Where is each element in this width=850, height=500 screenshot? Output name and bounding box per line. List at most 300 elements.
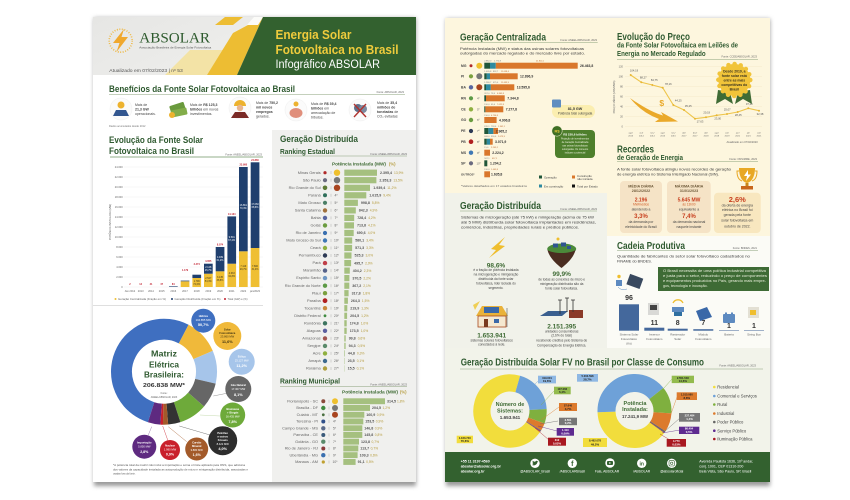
callout: investments: R$ 220,6 bilhões — [563, 133, 587, 137]
stat: 1.653.941: 1.653.941 — [477, 332, 507, 339]
municipal ranking table: 8º — [333, 447, 337, 451]
state ranking table: 690,6 4,0% — [357, 231, 375, 235]
legend: consumption classes: Poder Público — [717, 420, 744, 425]
bar chart: solar capacity: 4.939 — [217, 256, 224, 259]
bubble: solar: 23.860 MW — [220, 334, 235, 338]
benefit: CO2 — [349, 99, 398, 121]
heading: evolution — [109, 135, 263, 157]
panel: price evolution — [611, 31, 764, 144]
stat: 98,6% — [473, 263, 519, 290]
social: youtube — [595, 458, 620, 473]
contact: absolar.org.br — [461, 470, 485, 474]
bubble: coal: Carvão — [192, 440, 202, 444]
line chart: auction price: 40 — [620, 104, 624, 108]
state ranking table: 404,2 2,3% — [353, 269, 371, 273]
stacked bar chart by state: 11.058,4 — [501, 71, 510, 73]
stat: 98,6%: fotovoltaica, líder isolada do — [476, 281, 516, 285]
stat: 1.653.941 — [471, 332, 513, 346]
social: linkedin: /ABSOLAR — [633, 469, 651, 473]
legend: consumption classes — [713, 385, 757, 442]
record: maximum daily: MÁXIMA DIÁRIA — [675, 184, 704, 189]
bubble: nuclear: 0,9% — [166, 452, 175, 456]
bubble: solar — [213, 322, 241, 350]
bar chart: solar capacity: 24.860 — [251, 159, 259, 162]
chart legend — [539, 174, 598, 188]
benefit: capacity: Mais de — [135, 103, 147, 107]
stat: 98,6%: 98,6% — [487, 263, 505, 270]
icon: floating island — [547, 238, 576, 268]
bubble: biomass: 7,8% — [228, 420, 238, 424]
record: maximum daily: naquele instante — [677, 225, 702, 229]
tags: installed capacity: 86.404 — [685, 427, 694, 431]
stacked bar chart by state: 7.344,8 — [507, 97, 519, 101]
tags: number of systems: 1.413 — [562, 428, 569, 432]
stat: 2.151.395: (2,6% do total) — [551, 333, 572, 337]
badge: most competitive: entre as mais — [723, 78, 745, 82]
stacked bar chart by state: 4.756,8 — [491, 115, 499, 117]
chart legend: Geração Centralizada (Fração em %) — [118, 297, 166, 301]
line chart: auction price: ago/ — [629, 132, 633, 134]
bar chart: manufacturers: Módulo — [698, 333, 709, 337]
line chart: auction price: 23,00 — [714, 116, 722, 120]
stacked bar chart by state: 397,0 — [484, 93, 490, 95]
benefit: taxes: arrecadação de — [311, 111, 335, 115]
bar chart: manufacturers: 96 — [625, 295, 633, 302]
state ranking table: Acre — [313, 350, 321, 356]
stacked bar chart by state: 617,1 — [492, 158, 498, 160]
state ranking table: 1.615,9 9,4% — [369, 194, 391, 198]
record: average daily: 3,3% — [634, 214, 648, 220]
stacked bar chart by state: CE — [461, 108, 466, 112]
line chart: auction price: 32,38 — [757, 112, 764, 116]
bubble: oil: Fósseis — [218, 438, 228, 442]
icon: string box — [748, 307, 759, 318]
stat: 2.151.395: Compensação de Energia Elétrica. — [537, 344, 586, 348]
arrow: falling price — [630, 98, 678, 122]
donut chart: installed capacity — [577, 374, 700, 447]
heading: price evolution: Fonte: CCEE/ABSOLAR, 2023 — [722, 54, 758, 58]
tags: number of systems: 319.601 — [542, 376, 552, 380]
legend: consumption classes: Residencial — [717, 385, 739, 390]
state ranking table: Rio Grande do Sul — [289, 185, 321, 190]
state ranking table: 8º — [334, 224, 338, 228]
heading: price evolution — [617, 31, 758, 59]
line chart: auction price: 84,75 — [651, 78, 658, 82]
line chart: auction price: nov/ — [671, 132, 676, 134]
municipal ranking table: Potência Instalada (MW) — [342, 390, 399, 394]
stat: 2.151.395: unidades consumidoras — [545, 329, 579, 333]
municipal ranking table: 113,7 0,7% — [360, 447, 378, 451]
logo wordmark: ABSOLAR — [139, 31, 210, 47]
donut chart: number of systems: Número de — [496, 402, 524, 408]
state ranking table: 99,8 0,6% — [349, 337, 365, 341]
stacked bar chart by state: 1.204,2 — [490, 162, 501, 166]
tags: installed capacity: 4.770 — [673, 439, 680, 443]
callout: total granted power: 81,5 GW — [568, 107, 583, 111]
tags: installed capacity: 2.551.548 — [677, 376, 689, 380]
line chart: auction price: out/ — [639, 131, 644, 134]
social: twitter: @ABSOLAR_Brasil — [520, 469, 550, 473]
icon: trophy — [737, 168, 757, 190]
state ranking table: Mato Grosso do Sul — [286, 238, 321, 243]
stacked bar chart by state: 190,0 — [484, 104, 490, 106]
line chart: auction price: 78,16 — [665, 82, 672, 86]
benefit: taxes: Mais de — [311, 102, 324, 106]
bar chart: solar capacity: 23.980 — [239, 164, 248, 166]
bar chart: solar capacity: 2015 — [159, 289, 165, 293]
state ranking table: 14º — [334, 269, 340, 273]
line chart: auction price: 100 — [619, 74, 624, 78]
municipal ranking table: Uberlândia - MG — [289, 452, 318, 457]
benefit: taxes: bilhões — [311, 106, 323, 110]
line chart: auction price: 20,19 — [703, 110, 711, 114]
state ranking table: 21º — [334, 321, 340, 325]
tags: number of systems: 107.066 — [557, 387, 568, 391]
state ranking table: São Paulo — [303, 177, 321, 182]
stat: 99,9% — [538, 271, 585, 290]
benefit: taxes: R$ 39,4 — [324, 102, 337, 106]
tags: number of systems: 19,6% — [543, 379, 552, 383]
social: instagram: @absolaroficial — [660, 469, 684, 473]
panel: generation records — [617, 143, 761, 233]
stacked bar chart by state: 2.209,2 — [491, 147, 499, 149]
heading: records — [617, 143, 758, 162]
bar chart: solar capacity: 32,8% — [228, 275, 236, 278]
state ranking table: 27º — [334, 367, 340, 371]
benefit: taxes: tributos. — [311, 116, 323, 120]
bubble: solar: 11,6% — [222, 340, 233, 344]
record: monthly supply: 2,6% — [729, 195, 746, 204]
municipal ranking table: (%) — [400, 390, 407, 394]
benefit: investments: investimentos. — [190, 112, 212, 116]
stacked bar chart by state: 78,0 — [491, 93, 496, 95]
address: conj. 1001, CEP 01310-200 — [699, 464, 743, 468]
state ranking table: Rio de Janeiro — [296, 230, 321, 235]
state ranking table: 998,8 5,8% — [361, 201, 379, 205]
bar chart: solar capacity: 2022 — [240, 289, 247, 293]
heading: distributed generation — [460, 201, 598, 212]
bar chart: solar capacity: 16.861 — [240, 204, 248, 207]
stat: 98,6%: segmento. — [489, 286, 504, 290]
stacked bar chart by state: 6º — [477, 118, 480, 122]
state ranking table: 525,3 3,0% — [354, 254, 373, 258]
title — [276, 28, 398, 71]
benefit: CO2: 35,4 — [390, 101, 397, 105]
stacked bar chart by state: 13.595,6 — [517, 86, 530, 90]
stacked bar chart by state: 7.022,8 — [497, 104, 505, 106]
line chart: auction price: PREÇO MÉDIO (US$/MWh) — [611, 81, 616, 113]
bar chart: solar capacity: 38,8% — [217, 279, 224, 282]
record: maximum daily: equivalente a — [679, 208, 699, 212]
benefit: jobs: 750,2 — [269, 101, 278, 105]
legend: consumption classes: Serviço Público — [717, 428, 747, 433]
state ranking table: 24º — [334, 344, 340, 348]
municipal ranking table: 7º — [333, 440, 337, 444]
line chart: auction price: 35,25 — [685, 104, 692, 108]
social: facebook — [560, 459, 585, 473]
bar chart: solar capacity: 7.800 — [252, 265, 259, 268]
heading: state ranking — [280, 149, 408, 156]
tags: number of systems — [457, 376, 577, 446]
state ranking table: Rondônia — [304, 320, 322, 325]
stat: 98,6%: é a fração de potência instalada — [473, 268, 519, 272]
stacked bar chart by state: BA — [461, 86, 466, 90]
bubble: coal: 1,6% — [193, 453, 202, 457]
bar chart: solar capacity: 2.474 — [194, 263, 200, 266]
intro text: até 5 MW) distribuída solar fotovoltaica implantados em residências, — [461, 220, 596, 224]
line chart: auction price: 17,63 — [697, 120, 704, 124]
municipal ranking table: 109,3 0,6% — [360, 453, 378, 457]
stacked bar chart by state: 5º — [477, 108, 480, 112]
update date: Atualizado em 07/02/2023 | nº 53 — [109, 68, 184, 73]
intro text: Sistemas de microgeração (até 75 kW) e minigeração (acima de 75 kW — [461, 215, 594, 219]
stacked bar chart by state: 1.005,8 — [484, 71, 492, 73]
social: twitter — [520, 459, 550, 473]
line chart: auction price: 0 — [622, 124, 624, 128]
bubble: oil: 4,0% — [218, 447, 228, 451]
bar chart: solar capacity: 31,4% — [252, 268, 259, 271]
heading: price evolution: Energia no Mercado Regulado — [617, 51, 706, 58]
bar chart: solar capacity: 70,3% — [240, 207, 248, 210]
benefit: investments: Mais de — [190, 103, 203, 107]
benefit: capacity: operacionais. — [135, 112, 156, 116]
intro text: FINAME do BNDES. — [617, 260, 652, 264]
badge: most competitive: competitivas do — [721, 83, 747, 87]
state ranking table: 44,8 0,3% — [348, 352, 364, 356]
state ranking table: 15,5 0,1% — [348, 367, 364, 371]
bubble: coal — [185, 438, 208, 460]
line chart: auction price: out/ — [725, 131, 729, 134]
record: average daily: 28/12/2022 — [632, 189, 650, 193]
bubble: gas: 8,1% — [234, 393, 243, 397]
donut centre text: Brasileira: — [144, 370, 184, 380]
line chart: auction price: 2017 — [693, 136, 698, 138]
tags: installed capacity: 8,8% — [684, 396, 691, 400]
footnote: usadas fora da fonte. — [113, 473, 136, 476]
callout: investments: Projeção de investimentos — [561, 138, 590, 140]
bar chart: manufacturers: (Kit) — [626, 341, 632, 345]
bar chart: manufacturers: 8 — [676, 320, 680, 327]
stacked bar chart by state: 65,0 — [491, 104, 496, 106]
benefit: jobs: mil novos — [256, 106, 272, 110]
bar chart: solar capacity: 18.000 — [115, 195, 123, 199]
bar chart: solar capacity: 24.000 — [115, 165, 123, 169]
chart legend: Em construção — [544, 184, 564, 188]
social: facebook: /ABSOLARBrasil — [560, 469, 585, 473]
state ranking table: 10º — [334, 239, 340, 243]
panel: supply chain — [616, 241, 769, 345]
bar chart: manufacturers: Sistema Solar — [620, 333, 638, 337]
tags: number of systems: 3,7% — [565, 407, 572, 411]
state ranking table: 1.939,4 11,2% — [373, 186, 396, 190]
state ranking table: Ceará — [310, 245, 322, 250]
line chart: auction price: 2021 — [757, 136, 762, 138]
panel: benefits row — [109, 97, 398, 128]
bar chart: solar capacity: 1.179 — [182, 269, 189, 272]
benefit: jobs: Mais de — [256, 101, 269, 105]
line chart: auction price: 120 — [619, 64, 624, 68]
municipal ranking table: 9º — [333, 453, 337, 457]
footnote: dos valores da capacidade instalada as autoprodução de micro e minigeração distribuída, associadas e — [113, 468, 249, 471]
contact: +55 11 3197-4560 — [461, 460, 490, 464]
stacked bar chart by state: 150,0 — [484, 115, 490, 117]
state ranking table: Alagoas — [307, 328, 321, 333]
tags: installed capacity: 1.515.060 — [681, 392, 693, 396]
bubble: wind: 11,2% — [236, 364, 248, 368]
icon: solar module — [696, 307, 712, 321]
stacked bar chart by state: OUTROS* — [461, 172, 475, 176]
stacked bar chart by state: 1.286,7 — [484, 82, 492, 84]
state ranking table: 20º — [334, 314, 340, 318]
bar chart: solar capacity: 0 — [121, 285, 123, 289]
icon: tracker — [672, 300, 684, 316]
line chart: auction price: nov/ — [650, 132, 655, 134]
municipal ranking table: Campo Grande - MS — [282, 425, 318, 430]
stat: 1.653.941: sistemas solares fotovoltaicos — [471, 339, 513, 343]
title: Infográfico ABSOLAR — [276, 59, 380, 71]
line chart: auction price: 2021 — [746, 136, 752, 138]
municipal ranking table: 5º — [333, 426, 337, 430]
callout: investments: outorgadas. Os números — [562, 148, 589, 151]
bar chart: solar capacity: 17.060 — [251, 203, 259, 206]
tags: number of systems: 70,6% — [461, 439, 469, 443]
state ranking table: Paraíba — [307, 298, 322, 303]
municipal ranking table: 123,8 0,7% — [361, 440, 379, 444]
bar chart: solar capacity: 9.501 — [229, 236, 235, 239]
chart legend: Total (GW) e (%) — [228, 297, 248, 301]
panel: header banner — [93, 17, 416, 75]
state ranking table: 5º — [334, 201, 338, 205]
intro text: comércios, indústrias, propriedades rurais e prédios públicos. — [461, 226, 579, 230]
municipal ranking table: 6º — [333, 433, 337, 437]
municipal ranking table: 153,5 0,9% — [365, 420, 383, 424]
line chart: auction price — [611, 64, 764, 144]
stacked bar chart by state: 10º — [476, 162, 481, 166]
donut centre text: 206.838 MW* — [143, 383, 186, 389]
social: linkedin: in — [639, 461, 644, 467]
line chart: auction price: ago/ — [661, 132, 665, 134]
state ranking table: 204,5 1,2% — [350, 314, 369, 318]
chart legend: Construção — [577, 174, 592, 178]
bar chart: solar capacity: 29,7% — [240, 268, 248, 271]
donut chart: number of systems — [457, 376, 577, 446]
benefit: CO2: CO₂ evitadas — [377, 114, 398, 118]
footnote: *Valores detalhados em 17 estados brasileiros — [461, 184, 528, 188]
heading: records: de Geração de Energia — [617, 155, 683, 162]
municipal ranking table: 4º — [333, 420, 337, 424]
bubble: biomass: 16.435 MW — [226, 414, 240, 418]
intro text: A fonte solar fotovoltaica atingiu novos recordes de geração — [617, 168, 731, 172]
legend: consumption classes: Comercial e Serviços — [717, 394, 757, 399]
bubble: nuclear: 1.990 MW — [164, 448, 177, 452]
state ranking table: 713,8 4,1% — [357, 224, 376, 228]
bar chart: manufacturers: 11 — [651, 320, 658, 327]
municipal ranking table: Manaus - AM — [295, 459, 318, 464]
bar chart: solar capacity: 45,7% — [205, 269, 213, 272]
stacked bar chart by state: 1.445,8 — [491, 169, 499, 171]
heading: price evolution: Evolução do Preço — [617, 31, 690, 43]
municipal ranking table: Goiânia - GO — [295, 439, 318, 444]
heading: benefits: Fonte: ABSOLAR, 2023 — [377, 90, 405, 94]
chart legend — [114, 297, 248, 301]
line chart: auction price: $ — [659, 98, 664, 108]
bar chart: solar capacity: 2.128 — [205, 266, 212, 269]
bubble: oil: e outros — [217, 434, 229, 438]
bubble: gas: Gás Natural — [231, 383, 246, 387]
badge: most competitive: fonte solar está — [722, 74, 747, 78]
stacked bar chart by state: 870,1 — [484, 126, 490, 128]
donut centre text — [143, 349, 186, 399]
stacked bar chart by state: 2.965,2 — [496, 129, 507, 133]
stacked bar chart by state: 8º — [477, 140, 480, 144]
note: Dados acumulados desde 2012 — [109, 124, 146, 128]
benefit: investments: bilhões — [190, 108, 202, 112]
bar chart: solar capacity: 41 — [150, 283, 153, 286]
stacked bar chart by state: PB — [461, 140, 466, 144]
heading: price evolution: da Fonte Solar Fotovoltaica em Leilões de — [617, 42, 738, 50]
heading: supply chain: Fonte: BNDES, 2021 — [733, 246, 758, 250]
stacked bar chart by state: MS — [461, 151, 467, 155]
heading: supply chain — [617, 241, 758, 252]
record: monthly supply: elétrica no Brasil foi — [722, 208, 753, 212]
state ranking table: 264,3 1,5% — [351, 299, 369, 303]
bar chart: solar capacity: 72,6% — [193, 283, 201, 286]
footer — [445, 452, 770, 482]
bubble: coal: Mineral — [192, 444, 202, 448]
heading: distributed generation: Geração Distribuída — [280, 134, 359, 145]
icon: lightning — [489, 237, 505, 258]
state ranking table: Goiás — [311, 222, 321, 228]
stacked bar chart by state: PI — [461, 74, 464, 78]
bar chart: solar capacity: 8.000 — [116, 245, 123, 249]
stacked bar chart by state: 15,0 — [484, 147, 489, 149]
callout: industrial policy — [658, 267, 769, 291]
benefit: CO2: toneladas — [377, 110, 393, 114]
tags: installed capacity: 1,4% — [686, 417, 693, 421]
benefit: CO2: de — [393, 110, 398, 114]
bar chart: solar capacity — [107, 159, 263, 301]
line chart: auction price: 2015 — [660, 136, 666, 138]
bar chart: manufacturers: Fotovoltaico — [621, 337, 637, 341]
legend: consumption classes: Iluminação Pública — [717, 437, 753, 442]
line chart: auction price: 2018 — [714, 136, 720, 138]
municipal ranking table: Rio de Janeiro - RJ — [285, 446, 318, 451]
bubble: biomass: Biomassa — [226, 407, 240, 411]
bubble: solar: Solar — [224, 328, 231, 332]
bar chart: solar capacity: 14.134 — [228, 213, 236, 216]
tags: number of systems: 0,2% — [565, 421, 572, 425]
stacked bar chart by state: 11.633,9 — [501, 82, 510, 84]
heading: municipal ranking: Ranking Municipal — [280, 376, 340, 385]
legend: consumption classes: Industrial — [717, 411, 734, 416]
bubble: oil: 8.422 MW — [217, 442, 229, 446]
heading: state ranking: Fonte: ANEEL/ABSOLAR, 2023 — [370, 152, 408, 156]
social: facebook: f — [571, 461, 574, 468]
bar chart: solar capacity: 2.527 — [205, 277, 212, 280]
line chart: auction price: 2014 — [650, 136, 656, 138]
bar chart: manufacturers: String Box — [747, 333, 761, 337]
chart legend: Total por Estado — [577, 184, 598, 188]
benefit: capacity: 21,3 GW — [135, 108, 150, 112]
line chart: auction price: Atualizado em 07/02/2023 — [726, 140, 758, 144]
tags: installed capacity: 8.462.078 — [589, 438, 601, 442]
state ranking table: Amapá — [308, 358, 322, 363]
line chart: auction price: 28,45 — [735, 113, 742, 117]
panel: distributed generation ranking — [272, 130, 416, 482]
state ranking table: Minas Gerais — [298, 170, 321, 175]
municipal ranking table: 145,8 0,8% — [364, 433, 382, 437]
bubble: imports: 5.850 MW — [138, 444, 151, 448]
